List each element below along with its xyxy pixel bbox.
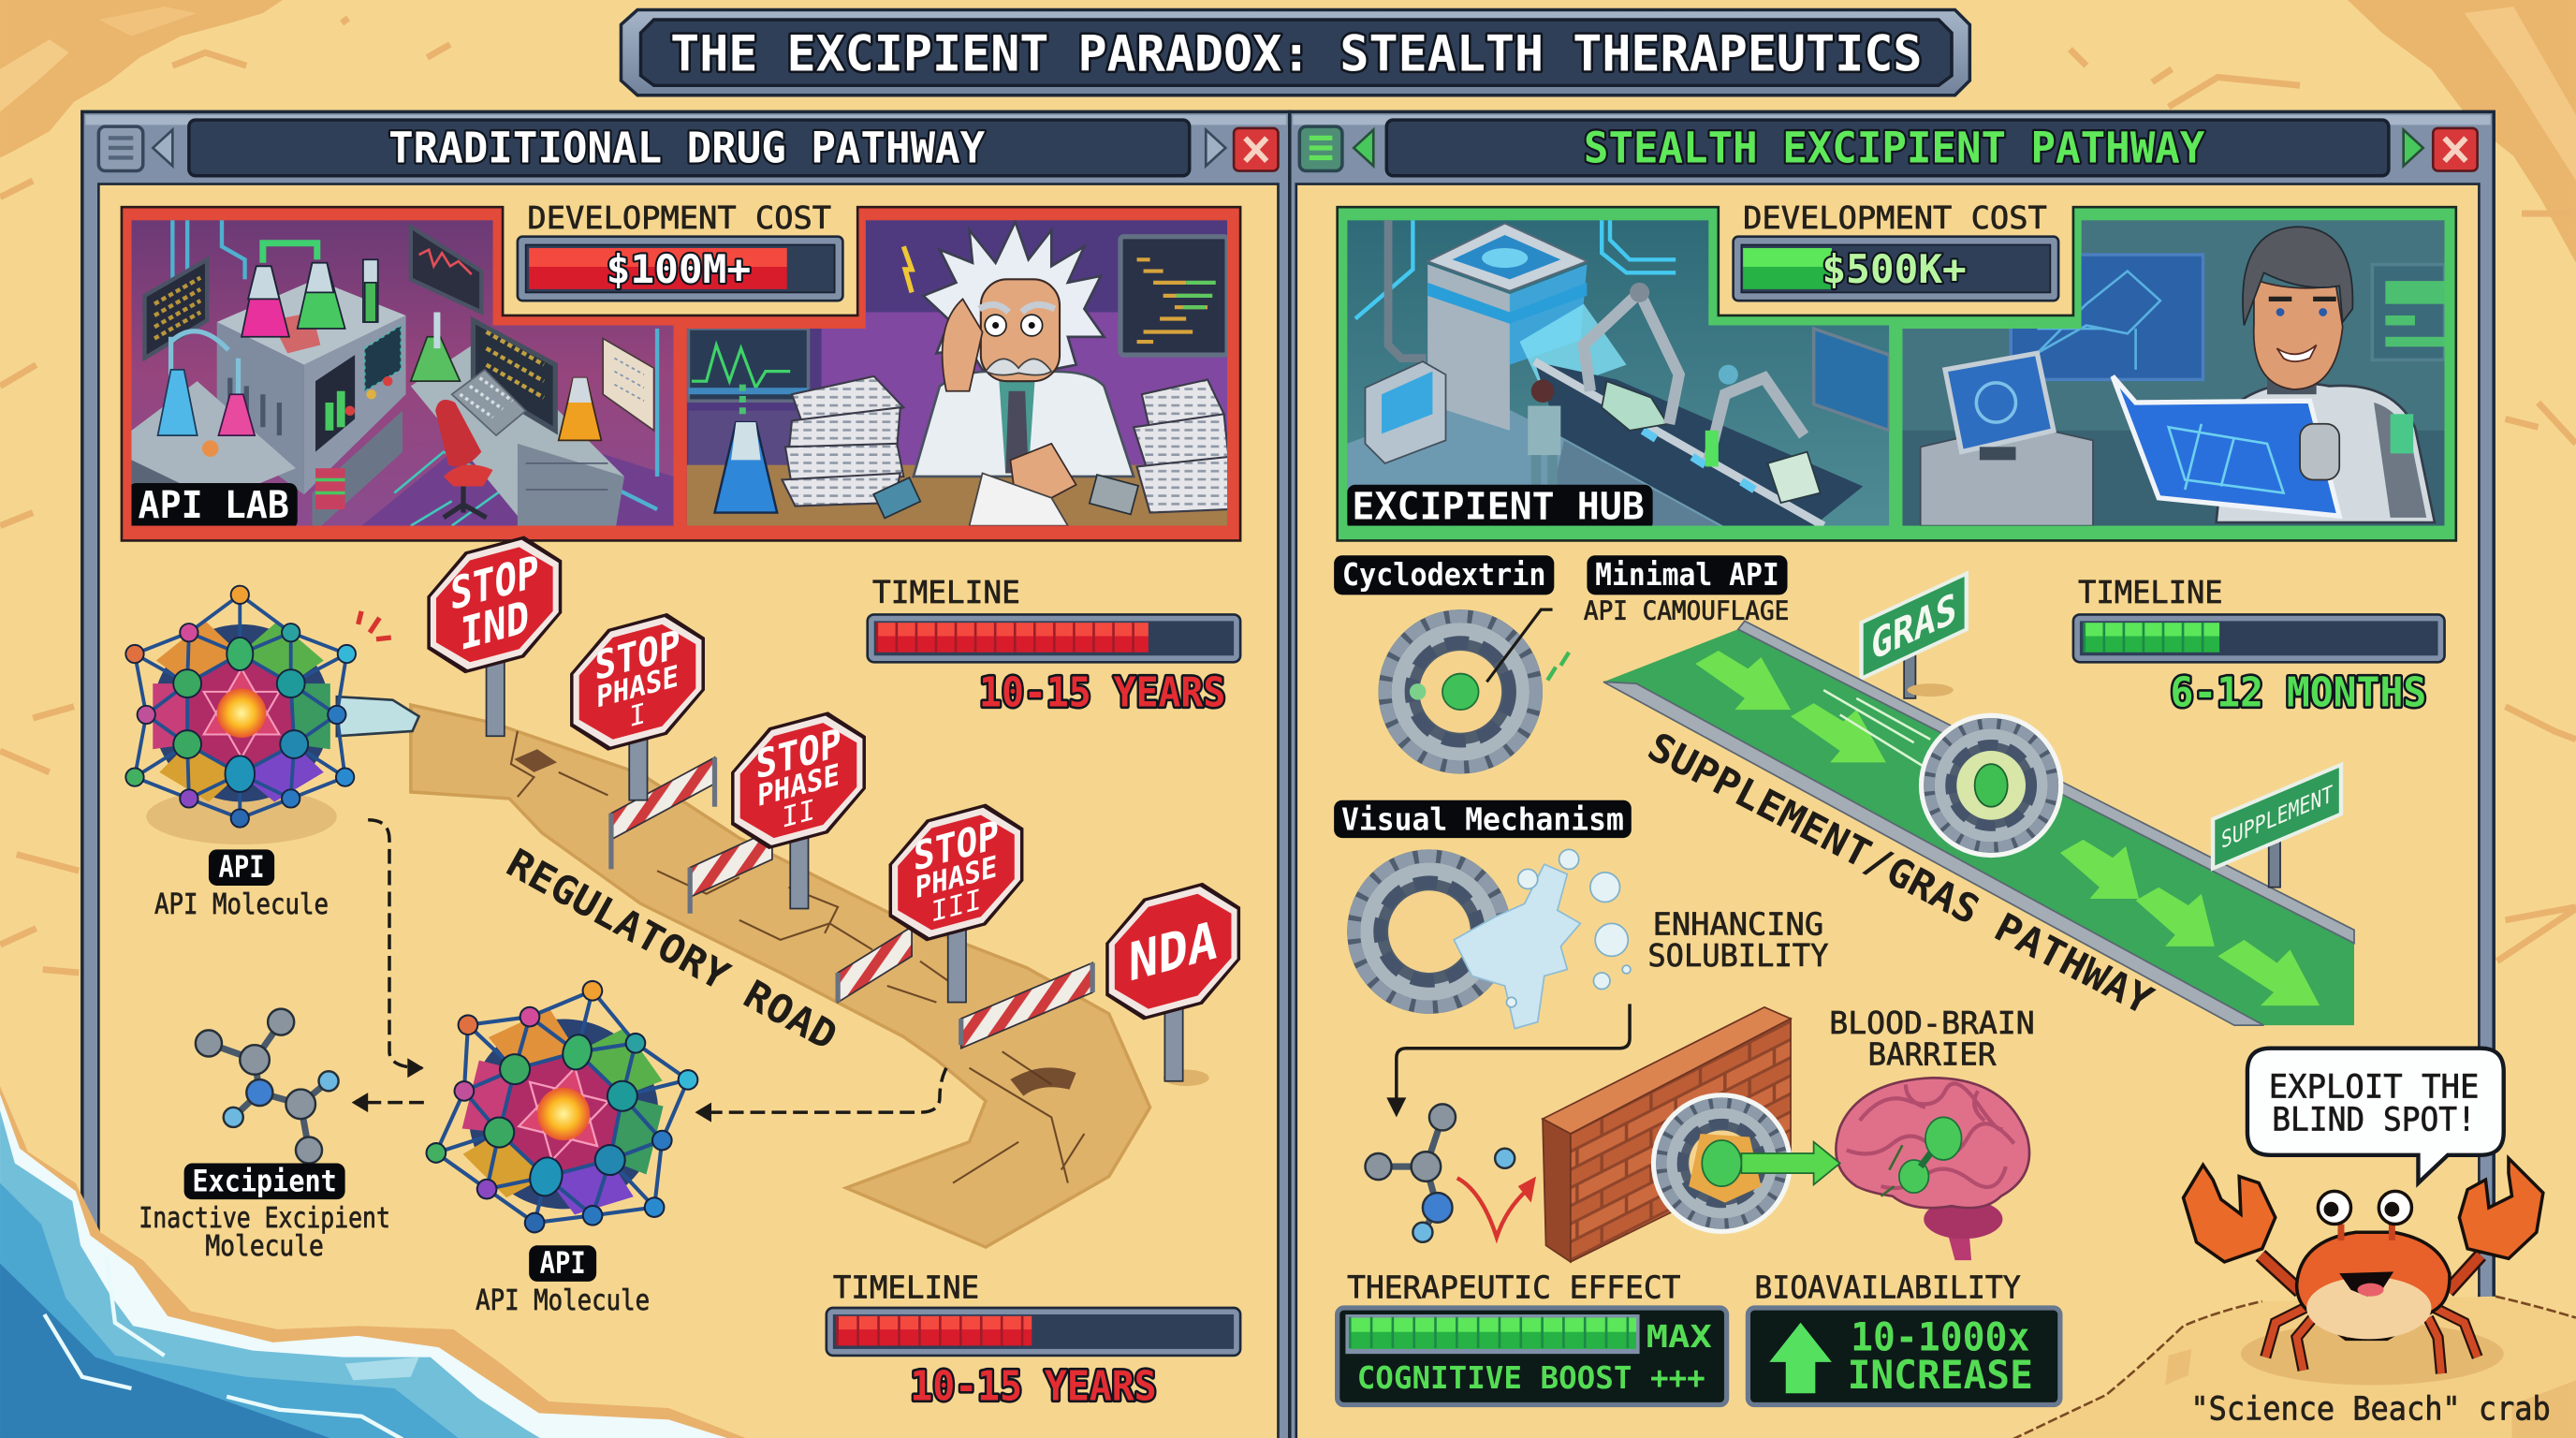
regulatory road [411,705,1150,1247]
title bar [1386,120,2389,176]
molecule: free API bounced [1365,1104,1536,1242]
caption: blood-brain barrier: BLOOD-BRAIN [1829,1005,2035,1041]
processing tower [1427,224,1587,431]
molecule: excipient [139,1009,390,1263]
table with blue and pink flasks [131,329,296,485]
wall status panel [2372,265,2445,360]
divider [675,325,685,533]
code screen [1120,237,1227,355]
development cost: traditional: DEVELOPMENT COST [527,199,831,236]
cyclodextrin releasing water splash [1347,849,1631,1029]
timeline: stealth [2073,574,2445,717]
ECG monitor [688,329,809,401]
stop sign: phase III: STOP [914,812,999,881]
stop sign: phase II: PHASE [757,756,840,814]
molecule: API with hand pushing at roadblock [125,586,419,921]
timeline: stealth: TIMELINE [2078,574,2223,610]
cost gauge: $500K+ [1822,246,1967,292]
stop sign: NDA [1105,873,1240,1086]
development cost: traditional [518,199,842,301]
legs [2265,1306,2478,1373]
scene: excipient hub [1347,220,1889,531]
increase panel: 10-1000x [1851,1314,2029,1360]
tag: API: API [540,1247,586,1281]
stop sign: phase II [731,701,866,909]
stop sign: phase I: STOP [594,622,681,690]
conveyor belt [1534,361,1863,529]
red office chair [435,400,493,518]
green entry arrow [1741,1142,1840,1184]
sign: GRAS behind the road [1862,574,1967,698]
tag: API: API [218,851,265,885]
label: API LAB: API LAB [138,483,289,527]
stop sign: phase III: III [931,884,981,930]
lab wall screens [145,227,481,359]
tag: Minimal API: Minimal API [1595,556,1779,593]
computer and cabinet [1921,353,2093,526]
engineer [2113,227,2435,522]
title banner [621,10,1969,95]
stop sign: phase I: PHASE [596,658,679,715]
caption: enhancing solubility: SOLUBILITY [1647,937,1828,974]
development cost: stealth: DEVELOPMENT COST [1743,199,2047,236]
meter panel: MAX [1647,1318,1712,1355]
window: stealth excipient pathway frame [1290,111,2494,1438]
desk with monitors and keyboard [411,312,624,526]
bounce arrow [1457,1178,1530,1238]
stop sign: IND: IND [460,591,529,661]
scene: overwhelmed scientist [687,220,1229,527]
sign: SUPPLEMENT: SUPPLEMENT [2221,781,2333,855]
window heading: TRADITIONAL DRUG PATHWAY [388,124,986,173]
arrowhead [352,1093,368,1112]
meter panel [1338,1308,1727,1405]
orange flask and chart [559,339,654,440]
caption: API Molecule [476,1284,650,1317]
science beach sand mound [2012,1297,2576,1438]
arrow: road to molecule [710,1068,946,1112]
timeline: upper traditional: TIMELINE [872,574,1020,610]
timeline: lower traditional [827,1269,1240,1410]
window heading: STEALTH EXCIPIENT PATHWAY [1584,124,2205,173]
barrier 4 [961,962,1092,1049]
speech bubble: EXPLOIT THE [2269,1067,2479,1106]
caption: blood-brain barrier [1829,1005,2035,1072]
tag: Excipient: Excipient [192,1165,337,1198]
increase panel [1748,1308,2060,1405]
stop sign: phase I [570,603,705,800]
brick wall: blood-brain barrier [1543,1007,1791,1262]
bioavailability panel [1748,1269,2060,1405]
pathway label: SUPPLEMENT/GRAS PATHWAY [1641,724,2160,1024]
label: EXCIPIENT HUB: EXCIPIENT HUB [1352,485,1645,529]
bioavailability panel: BIOAVAILABILITY [1754,1269,2021,1305]
timeline: upper traditional [868,574,1240,717]
timeline: lower traditional: TIMELINE [833,1269,979,1305]
divider [1891,325,1901,533]
smile [2339,1271,2393,1297]
robot arms [1584,292,1804,460]
arrow: solubility to barrier [1397,1004,1630,1104]
arrow: molecule to excipient [365,1102,424,1104]
speech bubble: BLIND SPOT! [2272,1100,2476,1138]
cost gauge [1734,237,2058,301]
sign: GRAS behind the road: GRAS [1871,582,1956,670]
sign: SUPPLEMENT [2213,765,2341,888]
therapeutic effect meter: THERAPEUTIC EFFECT [1347,1269,1680,1305]
crab caption: "Science Beach" crab [2190,1389,2551,1428]
speech bubble [2247,1049,2504,1183]
central lab console [217,279,406,534]
cyclodextrin crossing barrier [1651,1093,1840,1234]
technician [1528,379,1560,492]
barrier 3 [838,927,912,1003]
meter panel: COGNITIVE BOOST +++ [1357,1359,1705,1396]
progress bar [868,614,1240,662]
cost gauge: $100M+ [607,246,751,292]
stop sign: phase I: I [629,697,646,734]
stop sign: phase II: II [782,794,815,835]
blocked hand [337,697,419,736]
caption: blood-brain barrier: BARRIER [1868,1035,1997,1072]
claws [2183,1158,2543,1262]
caption: enhancing solubility: ENHANCING [1653,906,1823,943]
scientist [914,222,1134,526]
duration: 6-12 MONTHS [2170,669,2426,717]
stop sign: phase III: PHASE [915,848,997,905]
barrier 1 [611,757,714,869]
control kiosk [1365,361,1445,463]
green supplement/GRAS road [1603,621,2354,1025]
wall blueprint display [2011,255,2203,379]
scene: API lab [128,220,674,534]
stop sign: IND: STOP [450,546,539,621]
tag: Cyclodextrin: Cyclodextrin [1342,556,1546,593]
progress bar [827,1308,1240,1356]
green API in brain [1899,1117,1962,1193]
panel: green comic frame with hub scenes [1338,207,2456,540]
road label: REGULATORY ROAD [499,840,844,1059]
stop sign: phase III [889,794,1023,1003]
development cost: stealth [1734,199,2058,301]
cyclodextrin rolling on road [1919,713,2063,858]
flasks on console [242,259,378,337]
left arrow [153,130,172,166]
title bar [189,120,1190,176]
caption: API Molecule [154,888,329,921]
arms [2261,1255,2481,1291]
caption: Molecule [205,1230,324,1263]
desk surface [687,465,1229,527]
blue flask [714,381,777,513]
caption: API camouflage: API CAMOUFLAGE [1584,597,1789,626]
menu button [1299,126,1342,171]
duration: 10-15 YEARS [910,1362,1157,1410]
therapeutic effect meter [1338,1269,1727,1405]
paper stacks [782,376,1229,513]
body [2297,1232,2450,1339]
stop sign: IND [427,526,562,736]
tag: Visual Mechanism: Visual Mechanism [1341,800,1624,837]
increase panel: INCREASE [1848,1352,2033,1398]
duration: 10-15 YEARS [979,669,1225,717]
flow arrows [1695,651,2320,1005]
caption [139,1202,390,1263]
title: THE EXCIPIENT PARADOX: STEALTH THERAPEUTICS [670,25,1922,82]
window: traditional drug pathway frame [82,111,1290,1438]
molecule: API reformulated [414,952,715,1317]
wall monitor [1814,329,1889,431]
barrier 2 [690,829,772,914]
stop sign: phase II: STOP [755,720,842,789]
arrow: API to reformulated molecule [368,820,422,1068]
menu button [98,126,143,171]
arrowhead [695,1103,711,1123]
scene: confident engineer [1902,220,2445,529]
right arrow [2404,130,2423,166]
caption: enhancing solubility [1647,906,1828,974]
stop sign: NDA: NDA [1129,910,1218,994]
right arrow [1206,130,1225,166]
panel: red comic frame with lab scenes [122,207,1240,540]
cyclodextrin with minimal API [1379,609,1569,774]
progress bar [2073,614,2445,662]
arrowhead [407,1058,424,1078]
left arrow [1354,130,1373,166]
caption: Inactive Excipient [139,1202,390,1235]
cost gauge [518,237,842,301]
close button [1234,128,1278,171]
impact marks [359,611,391,639]
crab mascot [2183,1158,2543,1385]
ocean shoreline [0,1086,749,1438]
close button [2433,128,2478,171]
brain [1836,1078,2029,1260]
eyes [2318,1191,2411,1240]
arrowhead [1386,1097,1406,1117]
